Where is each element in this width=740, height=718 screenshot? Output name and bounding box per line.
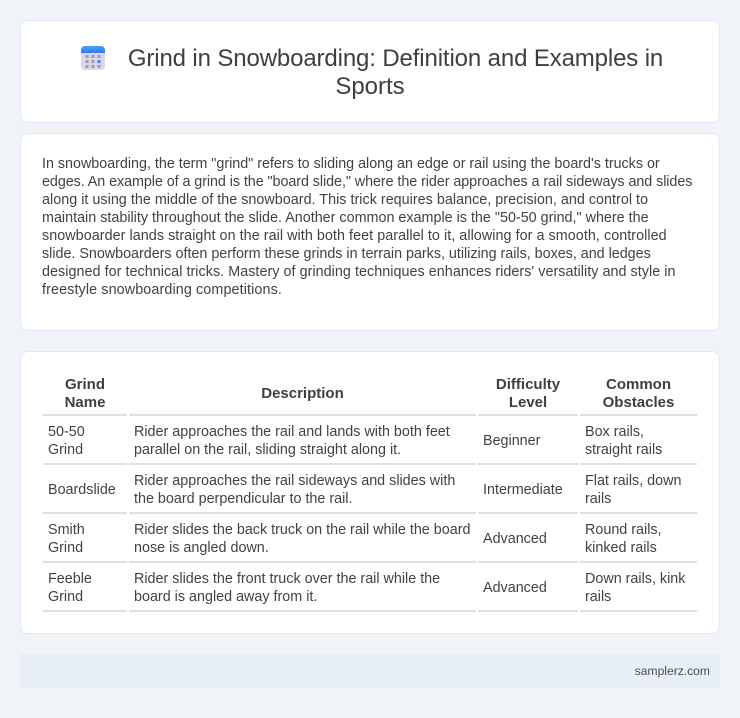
text: Common [606, 376, 671, 393]
text: rails [585, 491, 611, 507]
text: Description [261, 385, 344, 402]
text: the board perpendicular to the rail. [134, 491, 352, 507]
text: Obstacles [603, 394, 674, 411]
row lines [43, 414, 127, 416]
text: board is angled away from it. [134, 589, 317, 605]
text: Beginner [483, 433, 540, 449]
text: Advanced [483, 531, 547, 547]
text: Difficulty [496, 376, 560, 393]
text: parallel on the rail, sliding straight along it. [134, 442, 401, 458]
title [128, 45, 663, 100]
text: Box rails, [585, 424, 644, 440]
intro text: snowboarder lands straight on the rail with both feet parallel to it, allowing for a smooth, controlled [42, 228, 667, 244]
row: 50-50 grind: 50-50 [48, 424, 85, 440]
row: smith grind: Grind [48, 540, 83, 556]
intro text: freestyle snowboarding competitions. [42, 282, 282, 298]
text: kinked rails [585, 540, 657, 556]
table header: Grind [65, 376, 105, 393]
text: Rider slides the front truck over the rail while the [134, 571, 440, 587]
text: Rider approaches the rail and lands with both feet [134, 424, 450, 440]
text: straight rails [585, 442, 662, 458]
text: Advanced [483, 580, 547, 596]
text: Flat rails, down [585, 473, 681, 489]
footer text: samplerz.com [635, 664, 710, 678]
row: smith grind: Smith [48, 522, 85, 538]
row: feeble grind: Grind [48, 589, 83, 605]
row: feeble grind [48, 571, 92, 605]
intro text: In snowboarding, the term "grind" refers to sliding along an edge or rail using the board's trucks or [42, 156, 660, 172]
intro text: slide. Snowboarders often perform these grinds in terrain parks, utilizing rails, boxes, and ledges [42, 246, 651, 262]
title: Sports [335, 73, 405, 100]
text: nose is angled down. [134, 540, 269, 556]
intro text: designed for technical tricks. Mastery of grinding techniques enhances riders' versatility and style in [42, 264, 676, 280]
title card [20, 20, 720, 123]
row: 50-50 grind: Grind [48, 442, 83, 458]
text: Rider slides the back truck on the rail while the board [134, 522, 470, 538]
intro text: maintain stability throughout the slide. Another common example is the "50-50 grind," where the [42, 210, 649, 226]
text: Level [509, 394, 547, 411]
intro card [20, 133, 720, 331]
row: boardslide: Boardslide [48, 482, 116, 498]
table card [20, 351, 720, 634]
row: feeble grind: Feeble [48, 571, 92, 587]
icon: calendar [81, 46, 105, 70]
text: Down rails, kink [585, 571, 685, 587]
text: Rider approaches the rail sideways and slides with [134, 473, 455, 489]
text: rails [585, 589, 611, 605]
intro text: along it using the middle of the snowboard. This trick requires balance, precision, and control to [42, 192, 648, 208]
table header [65, 376, 105, 411]
row: 50-50 grind [48, 424, 85, 458]
text: Intermediate [483, 482, 563, 498]
title: Grind in Snowboarding: Definition and Examples in [128, 45, 663, 72]
row: smith grind [48, 522, 85, 556]
text: Round rails, [585, 522, 662, 538]
table header: Name [65, 394, 105, 411]
intro text: edges. An example of a grind is the "board slide," where the rider approaches a rail sideways and slides [42, 174, 692, 190]
intro text [42, 156, 692, 298]
footer bar [20, 654, 720, 688]
